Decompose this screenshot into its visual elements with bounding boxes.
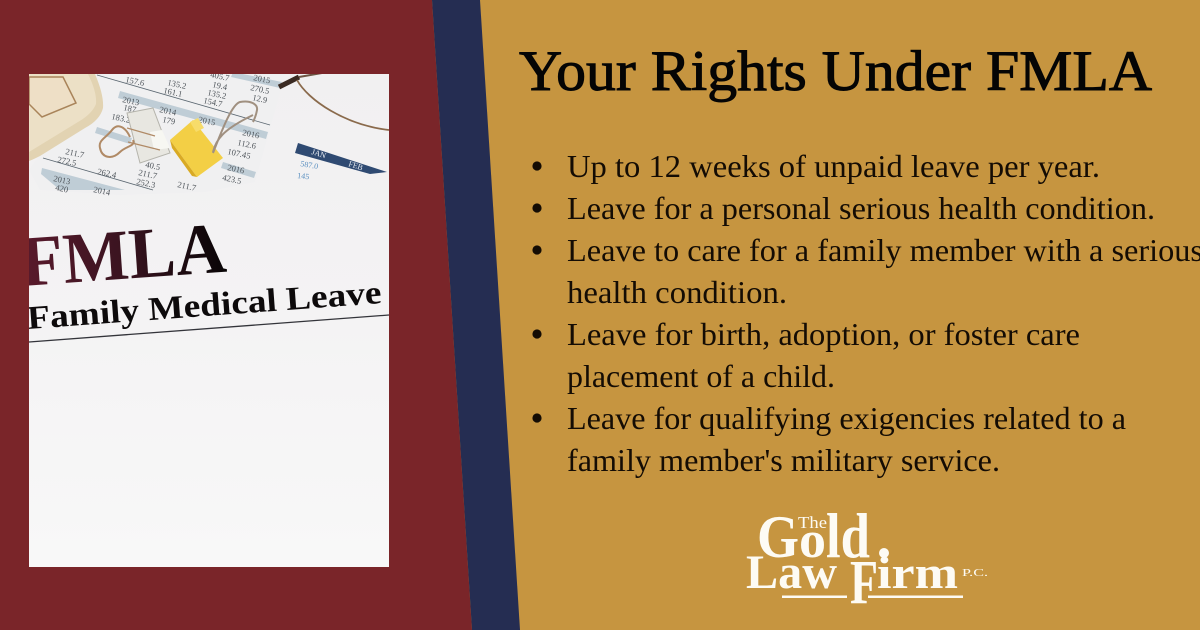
logo: The Gold Law Firm P.C.: Law bbox=[746, 546, 837, 599]
document rule line bbox=[29, 315, 389, 342]
data table sheet: 19.4 bbox=[212, 79, 229, 92]
data table sheet: 40.5 bbox=[145, 159, 161, 172]
bullet list bbox=[532, 148, 1200, 478]
bullet 1: Up to 12 weeks of unpaid leave per year. bbox=[567, 148, 1100, 184]
data table sheet: 157.6 bbox=[125, 74, 145, 88]
bullet 3 bbox=[532, 232, 1200, 310]
data table sheet: 420 bbox=[55, 182, 69, 195]
data table sheet: 2015 bbox=[253, 72, 271, 85]
data table sheet: 112.6 bbox=[237, 137, 257, 151]
data table sheet: 211.7 bbox=[177, 179, 197, 193]
data table sheet: 135.2 bbox=[207, 87, 227, 101]
data table sheet: 12.9 bbox=[252, 92, 268, 105]
data table sheet: 2014 bbox=[93, 184, 112, 198]
blue calendar table bbox=[295, 143, 387, 181]
logo: The Gold Law Firm P.C.: ld bbox=[826, 500, 870, 571]
navy diagonal band bbox=[432, 0, 520, 630]
data table sheet: 107.45 bbox=[227, 146, 252, 161]
data table sheet: 262.4 bbox=[97, 166, 118, 180]
photo text: FMLA: FMLA bbox=[18, 208, 229, 302]
yellow binder clip bbox=[170, 101, 257, 177]
data table sheet: 161.1 bbox=[163, 85, 183, 99]
blue calendar table: 587.0 bbox=[300, 159, 319, 171]
data table sheet: 423.5 bbox=[222, 172, 242, 186]
data table sheet: 2016 bbox=[227, 162, 245, 175]
bullet 5: Leave for qualifying exigencies related to a bbox=[567, 400, 1126, 436]
logo: The Gold Law Firm P.C.: o bbox=[799, 512, 826, 569]
data table sheet: 2016 bbox=[242, 127, 260, 140]
data table sheet: 2013 bbox=[122, 94, 140, 107]
title: Your Rights Under FMLA bbox=[519, 40, 1152, 103]
photo: FMLA document with clips and glasses bbox=[18, 69, 389, 567]
data table sheet: 252.3 bbox=[136, 176, 156, 190]
photo text: Family Medical Leave: Family Medical Leave bbox=[26, 275, 383, 337]
eyeglasses bbox=[279, 73, 389, 130]
bullet 4 bbox=[532, 316, 1080, 394]
data table sheet: 2013 bbox=[53, 173, 71, 186]
beige stapler-like object bbox=[29, 74, 103, 161]
data table sheet: 183.2 bbox=[111, 111, 131, 125]
data table sheet: 154.7 bbox=[203, 95, 223, 109]
logo: The Gold Law Firm P.C.: irm bbox=[877, 547, 958, 598]
blue calendar table: FEB bbox=[347, 159, 364, 172]
logo: The Gold Law Firm P.C.: P.C. bbox=[962, 567, 988, 579]
data table sheet: 211.7 bbox=[65, 146, 85, 160]
logo: The Gold Law Firm P.C.: G bbox=[757, 504, 799, 570]
data table sheet: 405.7 bbox=[210, 69, 230, 83]
blue calendar table: JAN bbox=[310, 147, 327, 160]
logo: The Gold Law Firm P.C.: F bbox=[850, 549, 878, 617]
bullet 4: Leave for birth, adoption, or foster care bbox=[567, 316, 1080, 352]
bullet 4: placement of a child. bbox=[567, 358, 835, 394]
data table sheet: 179 bbox=[162, 114, 176, 127]
data table sheet bbox=[41, 74, 282, 196]
bullet 3: Leave to care for a family member with a serious bbox=[567, 232, 1200, 268]
logo: The Gold Law Firm P.C.: The bbox=[798, 513, 827, 532]
data table sheet: 2014 bbox=[159, 104, 178, 118]
data table sheet: 270.5 bbox=[250, 82, 270, 96]
maroon left panel bbox=[0, 0, 472, 630]
bullet 2: Leave for a personal serious health condition. bbox=[567, 190, 1155, 226]
bullet 5 bbox=[532, 400, 1126, 478]
blue calendar table: 145 bbox=[297, 171, 310, 181]
white binder clip bbox=[100, 108, 170, 163]
bullet 3: health condition. bbox=[567, 274, 787, 310]
logo: The Gold Law Firm P.C. bbox=[746, 500, 988, 617]
data table sheet: 135.2 bbox=[167, 77, 187, 91]
data table sheet: 272.5 bbox=[57, 154, 77, 168]
bullet 5: family member's military service. bbox=[567, 442, 1000, 478]
data table sheet: 2015 bbox=[198, 114, 216, 127]
data table sheet: 211.7 bbox=[138, 167, 158, 181]
data table sheet: 187 bbox=[123, 102, 137, 115]
